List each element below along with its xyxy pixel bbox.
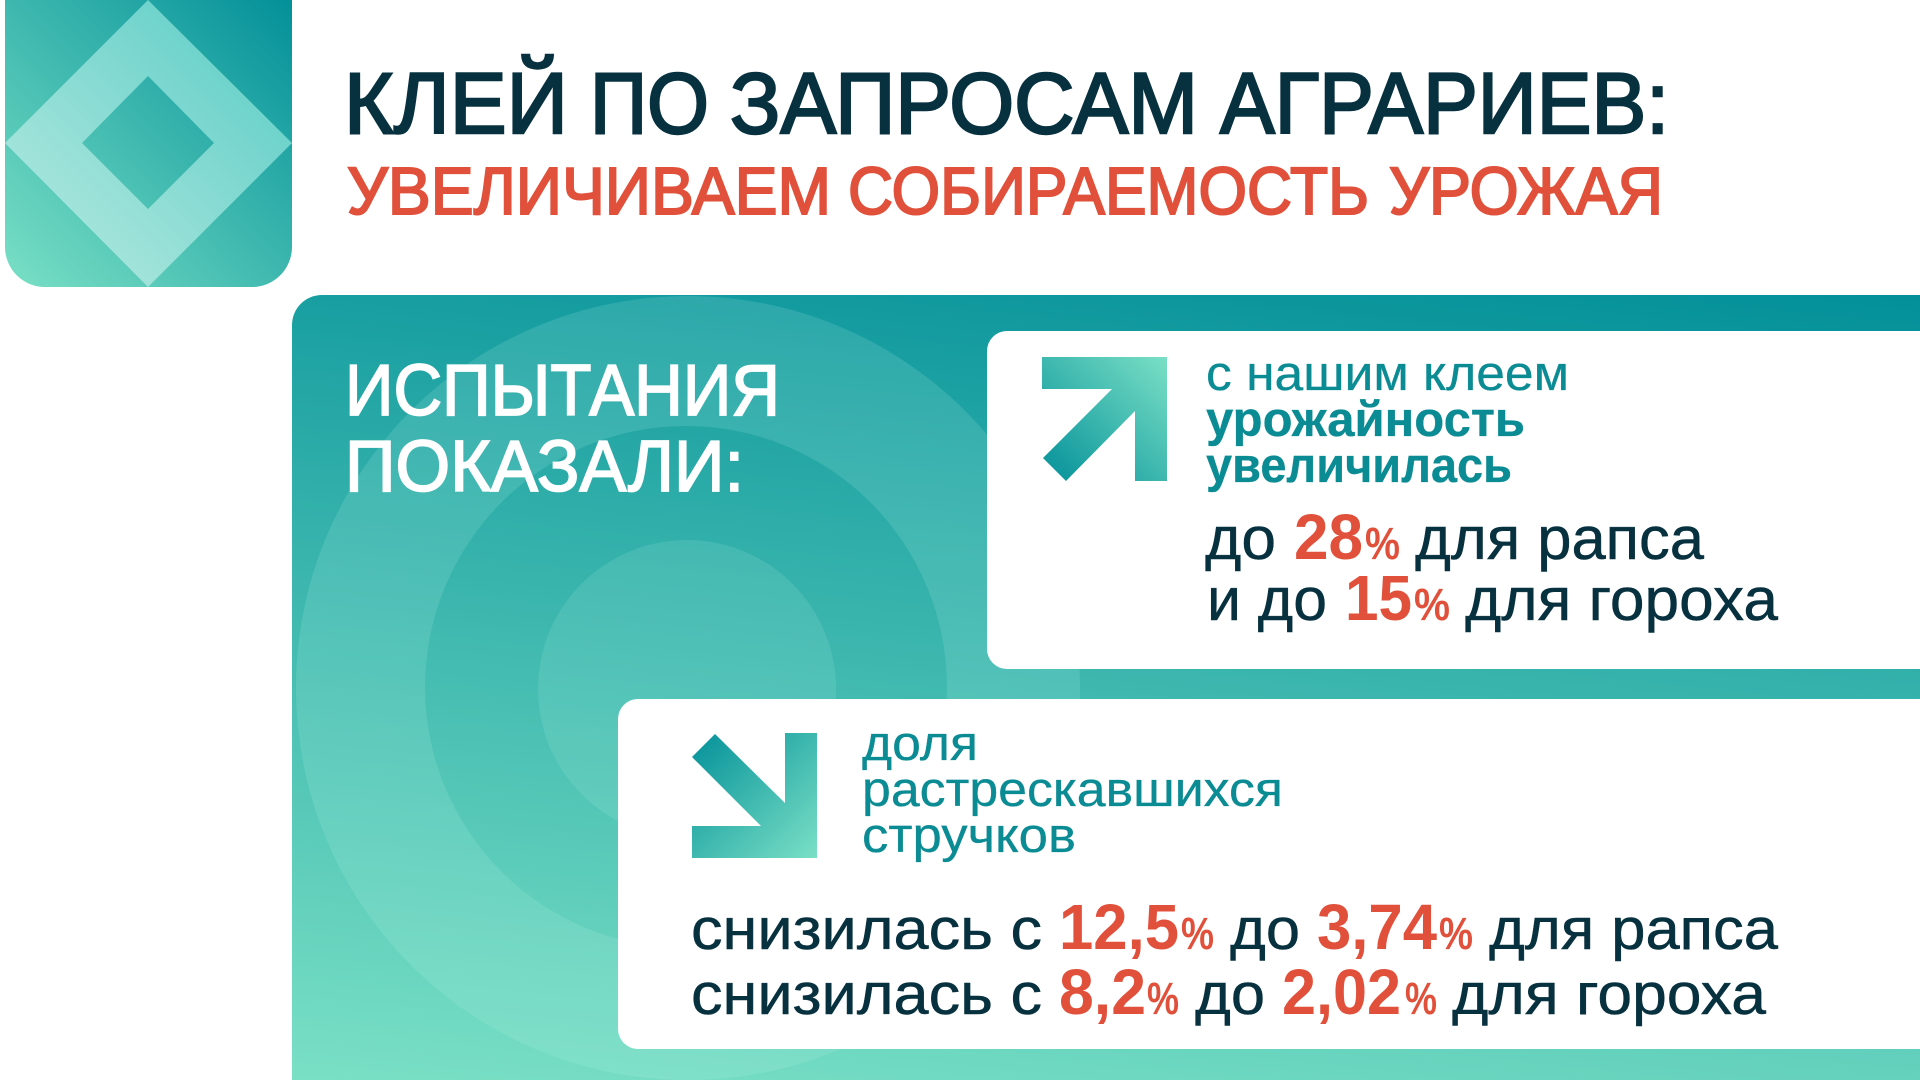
panel heading: ИСПЫТАНИЯ <box>345 351 780 431</box>
yield values: % <box>1365 518 1400 569</box>
pods label <box>862 717 1283 863</box>
pods values: для рапса <box>1489 897 1779 962</box>
pods values: % <box>1405 973 1437 1024</box>
yield values: до <box>1205 505 1276 572</box>
pods values: 8,2 <box>1059 956 1146 1028</box>
pods values: снизилась с <box>691 962 1042 1027</box>
yield values <box>1205 501 1779 634</box>
panel: gradient background <box>292 295 1920 1080</box>
yield values: для гороха <box>1465 566 1779 633</box>
pods values: для гороха <box>1452 962 1767 1027</box>
pods values: 12,5 <box>1059 891 1179 963</box>
icon: logo diamond tile <box>5 0 292 287</box>
title <box>344 55 1669 229</box>
title: ПО <box>590 56 709 152</box>
concentric circles <box>296 296 1080 1080</box>
title: КЛЕЙ <box>344 55 568 152</box>
yield label: с нашим клеем <box>1206 347 1569 401</box>
title: УВЕЛИЧИВАЕМ <box>347 154 831 229</box>
panel heading: ПОКАЗАЛИ: <box>345 427 744 507</box>
pods values: 3,74 <box>1317 891 1437 963</box>
icon: arrow down right <box>692 733 817 858</box>
pods values: % <box>1147 973 1179 1024</box>
title: СОБИРАЕМОСТЬ <box>848 154 1369 229</box>
pods values: % <box>1181 908 1214 959</box>
yield values: % <box>1414 579 1450 630</box>
yield values: для рапса <box>1415 505 1705 572</box>
icon: arrow up right <box>1042 357 1167 481</box>
yield label: урожайность <box>1206 393 1525 447</box>
panel: cracked pods card <box>618 699 1920 1049</box>
pods label: стручков <box>862 809 1076 863</box>
pods values: до <box>1230 897 1300 962</box>
title: ЗАПРОСАМ <box>730 56 1198 152</box>
pods label: доля <box>862 717 978 771</box>
panel: yield card <box>987 331 1920 669</box>
yield values: 15 <box>1345 562 1412 634</box>
pods values: до <box>1195 962 1265 1027</box>
pods values: снизилась с <box>691 897 1042 962</box>
pods label: растрескавшихся <box>862 763 1283 817</box>
pods values: % <box>1439 908 1473 959</box>
yield label <box>1206 347 1569 493</box>
yield label: увеличилась <box>1206 439 1512 493</box>
panel heading <box>345 351 780 507</box>
yield values: и до <box>1207 566 1327 633</box>
yield values: 28 <box>1294 501 1363 573</box>
pods values <box>691 891 1779 1028</box>
title: АГРАРИЕВ: <box>1220 56 1669 152</box>
title: УРОЖАЯ <box>1389 154 1663 229</box>
pods values: 2,02 <box>1282 956 1401 1028</box>
